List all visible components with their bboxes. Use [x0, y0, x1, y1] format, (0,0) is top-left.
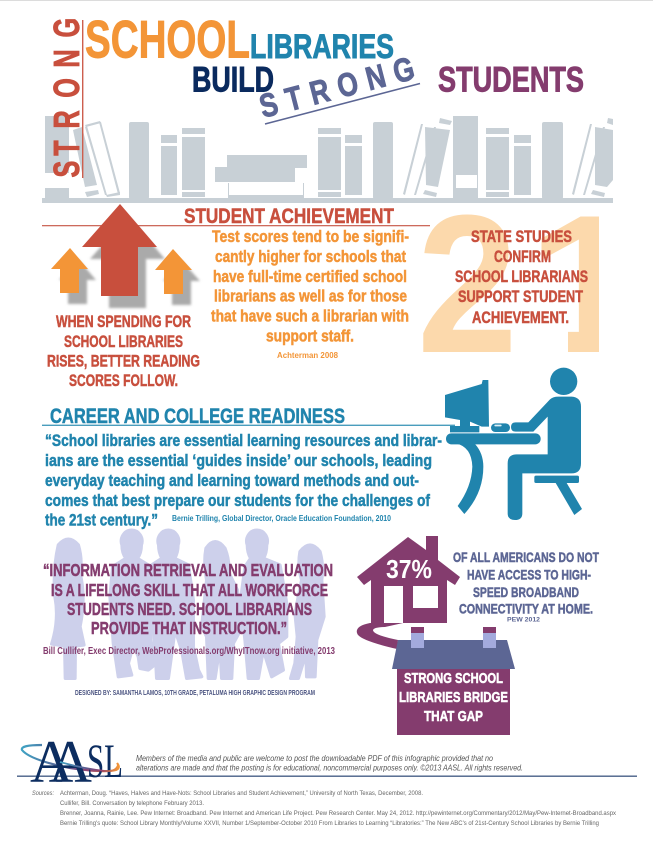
quote: information retrieval: IS A LIFELONG SKILL THAT ALL WORKFORCE — [51, 580, 328, 600]
text: usage notice — [136, 753, 523, 772]
quote: information retrieval: “INFORMATION RETRIEVAL AND EVALUATION — [43, 560, 333, 580]
text: broadband access — [453, 550, 600, 616]
quote: school libraries — [45, 431, 442, 530]
text: usage notice: alterations are made and that the posting is for educational, noncommercial purposes only. ©2013 AASL. All rights reserved. — [136, 762, 523, 772]
icon: person at computer — [445, 368, 582, 520]
quote: school libraries: comes that best prepare our students for the challenges of — [45, 491, 430, 510]
heading: student achievement: STUDENT ACHIEVEMENT — [184, 205, 394, 228]
text: spending and reading scores: SCORES FOLLOW. — [69, 372, 178, 390]
text: spending and reading scores — [47, 313, 200, 390]
title: SCHOOL: SCHOOL — [85, 10, 250, 70]
logo: AASL — [22, 729, 123, 795]
citation: Pew: PEW 2012 — [507, 616, 540, 624]
quote: information retrieval — [43, 560, 333, 638]
text: sources: Brenner, Joanna, Rainie, Lee. Pew Internet: Broadband. Pew Internet and American Life Project. Pew Research Center. May 24, 2012. http://pewinternet.org/Commentary/2012/May/Pew-Internet-Broadband.aspx — [60, 811, 616, 817]
quote: information retrieval: PROVIDE THAT INSTRUCTION.” — [91, 618, 287, 638]
text: sources: Cullifer, Bill. Conversation by telephone February 2013. — [60, 801, 204, 807]
quote: school libraries: ians are the essential ‘guides inside’ our schools, leading — [45, 451, 432, 470]
logo: AASL: AA — [30, 729, 92, 795]
icon: school building — [392, 627, 515, 735]
text: sources: Achterman, Doug. “Haves, Halves and Have-Nots: School Libraries and Student Achievement,” University of North Texas, December, 2008. — [60, 791, 423, 797]
text: test scores: cantly higher for schools that — [215, 248, 406, 266]
text: broadband access: OF ALL AMERICANS DO NOT — [453, 550, 600, 565]
title: STUDENTS: STUDENTS — [438, 60, 584, 100]
text: test scores: have full-time certified school — [213, 268, 407, 286]
text: test scores — [211, 228, 409, 346]
icon: house with 37 percent — [357, 536, 460, 649]
big number 21: 2 — [417, 175, 518, 395]
citation: Bill Cullifer: Bill Cullifer, Exec Director, WebProfessionals.org/WhyITnow.org initiative, 2013 — [43, 645, 335, 657]
text: sources: Sources: — [32, 791, 54, 797]
text: bridge the gap: LIBRARIES BRIDGE — [399, 690, 508, 706]
text: broadband access: SPEED BROADBAND — [473, 585, 579, 600]
text: spending and reading scores: WHEN SPENDING FOR — [56, 313, 191, 331]
title: BUILD: BUILD — [192, 60, 274, 100]
text: state studies: SUPPORT STUDENT — [458, 288, 583, 306]
text: bridge the gap: STRONG SCHOOL — [404, 671, 503, 687]
logo: AASL: SL — [87, 735, 123, 788]
citation: Achterman: Achterman 2008 — [277, 351, 339, 360]
text: test scores: support staff. — [266, 328, 354, 346]
stat: 37%: 37% — [386, 554, 432, 584]
text: test scores: that have such a librarian with — [211, 308, 409, 326]
footer rule — [17, 776, 637, 777]
text: test scores: Test scores tend to be signifi- — [212, 228, 409, 246]
citation: Bernie Trilling: Bernie Trilling, Global Director, Oracle Education Foundation, 2010 — [172, 513, 391, 523]
text: bridge the gap — [399, 671, 508, 725]
big number 21 — [423, 214, 599, 352]
text: broadband access: HAVE ACCESS TO HIGH- — [467, 568, 591, 582]
credit: designer: DESIGNED BY: SAMANTHA LAMOS, 10TH GRADE, PETALUMA HIGH GRAPHIC DESIGN PROGRAM — [75, 688, 315, 697]
silhouettes of students — [52, 530, 324, 678]
text: spending and reading scores: RISES, BETTER READING — [47, 352, 200, 370]
text: sources — [32, 791, 616, 827]
quote: school libraries: “School libraries are essential learning resources and librar- — [45, 431, 442, 450]
text: broadband access: CONNECTIVITY AT HOME. — [459, 602, 593, 616]
heading: career and college readiness: CAREER AND COLLEGE READINESS — [50, 405, 345, 428]
quote: school libraries: everyday teaching and learning toward methods and out- — [45, 471, 419, 490]
quote: information retrieval: STUDENTS NEED. SCHOOL LIBRARIANS — [67, 599, 312, 619]
title: angled STRONG with underline: STRONG — [256, 51, 418, 125]
title: LIBRARIES: LIBRARIES — [250, 28, 394, 66]
icon: rising arrows — [51, 204, 200, 308]
text: bridge the gap: THAT GAP — [424, 709, 483, 725]
text: state studies: SCHOOL LIBRARIANS — [455, 268, 588, 286]
text: state studies: STATE STUDIES — [471, 228, 572, 246]
big number 21: 1 — [526, 174, 652, 394]
text: test scores: librarians as well as for those — [214, 288, 407, 306]
text: usage notice: Members of the media and public are welcome to post the downloadable PDF of this infographic provided that no — [136, 753, 493, 763]
text: state studies — [455, 228, 588, 327]
text: sources: Bernie Trilling's quote: School Library Monthly/Volume XXVII, Number 1/September-October 2010 From Libraries to Learning “Libratories:” The New ABC's of 21st-Century School Libraries by Bernie Trilling — [60, 821, 599, 827]
text: state studies: ACHIEVEMENT. — [472, 309, 569, 327]
text: spending and reading scores: SCHOOL LIBRARIES — [64, 333, 183, 351]
bookshelf illustration — [42, 116, 613, 203]
title: vertical STRONG: STRONG — [47, 18, 87, 178]
quote: school libraries: the 21st century.” — [45, 510, 158, 530]
text: state studies: CONFIRM — [494, 248, 551, 266]
